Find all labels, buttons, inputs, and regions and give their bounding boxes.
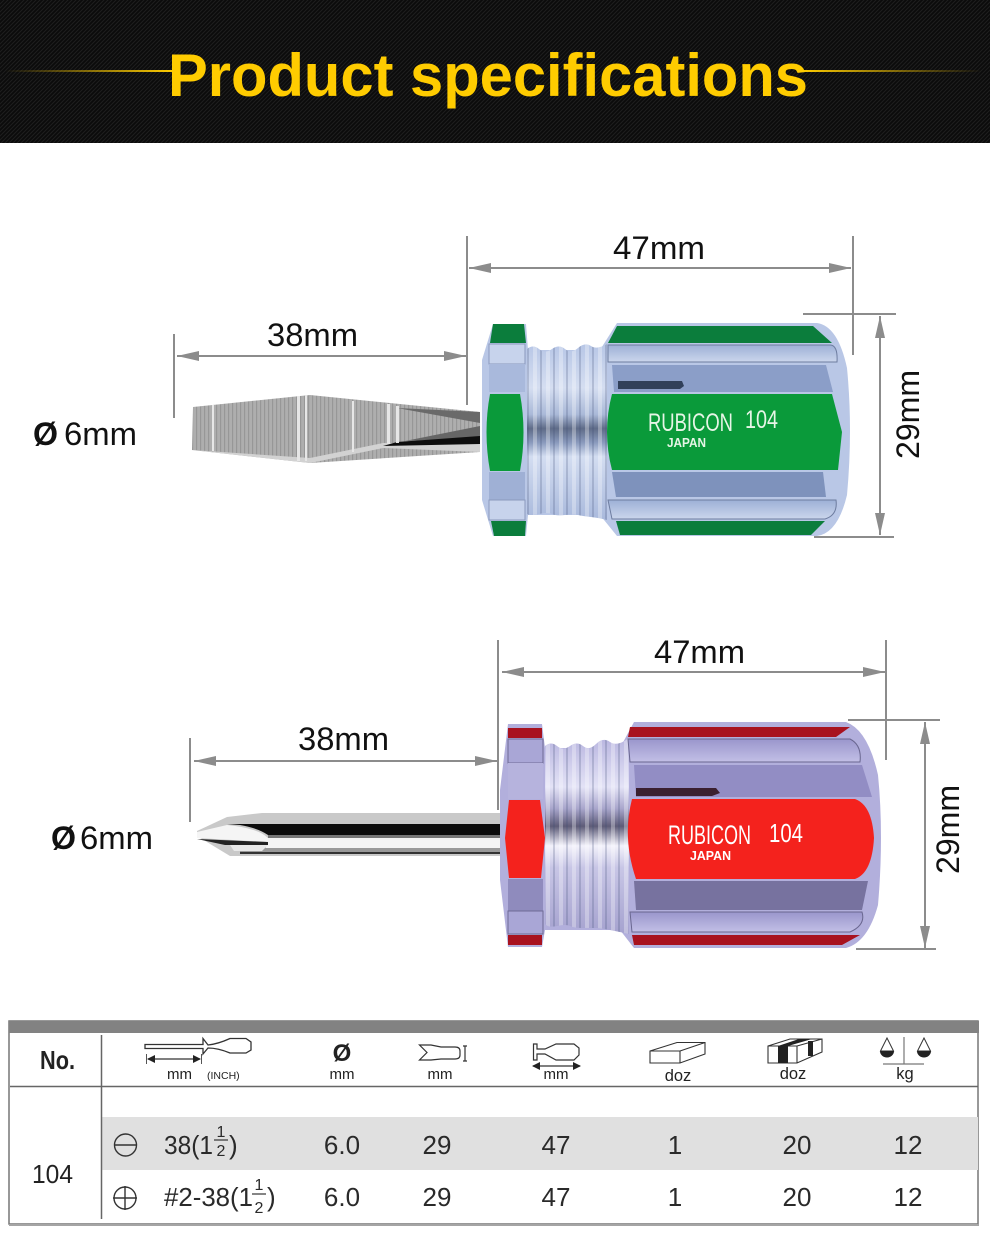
icon: handle diameter [420, 1045, 467, 1083]
dimension labels: red: 47mm [654, 634, 745, 670]
handle label: 104 [769, 818, 803, 848]
column header: diameter [330, 1040, 354, 1083]
handle label: JAPAN [667, 435, 706, 450]
row: phillips [113, 1177, 922, 1217]
icon: box [650, 1042, 705, 1085]
icon: handle diameter: mm [428, 1066, 452, 1083]
specification table [9, 1021, 979, 1226]
row: slotted: 29 [423, 1130, 451, 1160]
panel: phillips screwdriver [51, 634, 966, 949]
row: slotted [114, 1124, 922, 1160]
handle label [668, 818, 803, 863]
row: phillips: ) [267, 1182, 276, 1212]
row: phillips: #2-38(1 [164, 1182, 253, 1212]
dimension labels: green: 38mm [267, 317, 358, 353]
dimension labels: green [33, 230, 926, 459]
icon: carton [768, 1039, 822, 1083]
icon: handle length [533, 1044, 580, 1083]
dimension labels: red: 6mm [80, 820, 153, 856]
column header: No.: No. [40, 1045, 75, 1075]
row: slotted: 1 [668, 1130, 682, 1160]
icon: box: doz [665, 1067, 691, 1085]
model number: 104 [32, 1159, 73, 1189]
row: slotted: ) [229, 1130, 238, 1160]
dimension arrows: green [174, 236, 896, 537]
icon: handle length: mm [544, 1066, 568, 1083]
row: phillips: 47 [542, 1182, 570, 1212]
row: slotted: 2 [217, 1143, 226, 1160]
dimension labels: red [51, 634, 966, 874]
handle label: JAPAN [690, 848, 731, 863]
row: phillips: 12 [894, 1182, 922, 1212]
red handle [500, 722, 881, 948]
row: phillips: 1 [668, 1182, 682, 1212]
dimension labels: green: 6mm [64, 416, 137, 452]
title: Product specifications [168, 42, 808, 109]
row: slotted: 38(1 [164, 1130, 213, 1160]
green handle [482, 323, 850, 536]
icon: blade length: (INCH) [207, 1070, 240, 1082]
dimension labels: green: 47mm [613, 230, 705, 266]
row: slotted: 47 [542, 1130, 570, 1160]
row: phillips: 2 [255, 1200, 264, 1217]
row: slotted: 20 [783, 1130, 811, 1160]
dimension labels: red: 38mm [298, 721, 389, 757]
column header: diameter: mm [330, 1066, 354, 1083]
dimension labels: green: 29mm [890, 370, 926, 459]
dimension arrows: red [190, 640, 940, 949]
panel: flat-head screwdriver [33, 230, 926, 537]
dimension labels: red: Ø [51, 820, 76, 856]
flat blade [192, 395, 480, 463]
header banner [0, 0, 990, 143]
column header: diameter: Ø [333, 1040, 351, 1067]
icon: carton: doz [780, 1065, 806, 1083]
row: slotted: 6.0 [324, 1130, 360, 1160]
phillips shaft [197, 813, 500, 856]
handle label: 104 [745, 406, 778, 434]
dimension labels: red: 29mm [930, 785, 966, 874]
row: phillips: 6.0 [324, 1182, 360, 1212]
icon: blade length [145, 1038, 251, 1083]
icon: blade length: mm [167, 1066, 192, 1083]
row: phillips: 29 [423, 1182, 451, 1212]
icon: scale: kg [896, 1065, 914, 1083]
icon: scale [880, 1037, 931, 1083]
handle label [648, 406, 778, 450]
row: slotted: 12 [894, 1130, 922, 1160]
row: phillips: 1 [255, 1177, 264, 1194]
row: slotted: 1 [217, 1124, 226, 1141]
dimension labels: green: Ø [33, 416, 58, 452]
handle label: RUBICON [668, 820, 751, 850]
handle label: RUBICON [648, 409, 733, 437]
row: phillips: 20 [783, 1182, 811, 1212]
